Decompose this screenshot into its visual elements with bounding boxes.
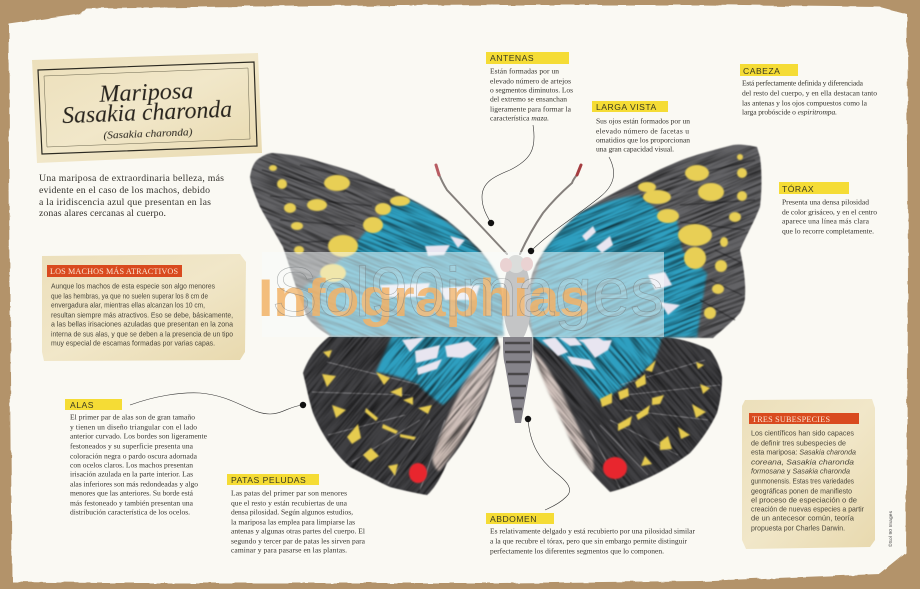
text: larga vista — [596, 116, 690, 154]
label: larga vista: LARGA VISTA — [596, 102, 657, 112]
text: alas: menores que las anteriores. Su borde está — [70, 488, 194, 498]
text: patas peludas: que el resto y están recubiertas de una — [231, 498, 348, 508]
antennae — [436, 165, 581, 254]
text: antenas — [490, 66, 573, 122]
text: patas peludas: caminar y para pasarse en las plantas. — [231, 546, 347, 554]
panel: tres subespecies — [742, 399, 875, 549]
heading: tres subespecies: TRES SUBESPECIES — [752, 415, 830, 424]
text: tórax: Presenta una densa pilosidad — [782, 198, 869, 206]
leader line: abdomen — [525, 416, 570, 510]
text: tres subespecies: propuesta por Charles Darwin. — [751, 524, 845, 532]
text: antenas: elevado número de artejos — [490, 76, 571, 86]
title text: Sasakia charonda — [62, 97, 233, 129]
label: abdomen: ABDOMEN — [490, 514, 537, 524]
watermark band: Infographias — [258, 269, 590, 328]
text: antenas: ligeramente para formar la — [490, 104, 572, 114]
butterfly illustration — [186, 63, 829, 589]
label: larga vista — [592, 101, 690, 154]
text: alas: irisación azulada en la parte interior. Las — [70, 470, 193, 478]
label: tórax: TÓRAX — [782, 184, 814, 194]
hindwing left — [225, 239, 578, 589]
text: alas: más festoneado y también presentan una — [70, 498, 194, 508]
text: patas peludas: segundo y tercer par de patas les sirven para — [231, 536, 366, 546]
text: cabeza: del resto del cuerpo, y en ella destacan tanto — [742, 88, 877, 98]
label: antenas: ANTENAS — [490, 53, 534, 63]
text: tres subespecies: formosana y Sasakia charonda — [751, 466, 850, 476]
intro text: a la iridiscencia azul que presentan en las — [39, 197, 211, 208]
forewing left — [186, 65, 568, 424]
watermark band: Sol90images — [272, 253, 664, 331]
text: los machos — [51, 282, 234, 348]
intro text: zonas alares cercanas al cuerpo. — [39, 208, 166, 219]
credit: ©Sol 90 Images — [887, 510, 894, 547]
leader line: larga vista — [528, 157, 614, 254]
label: alas: ALAS — [70, 400, 94, 410]
text: patas peludas: Las patas del primer par son menores — [231, 488, 347, 498]
text: abdomen: perfectamente los diferentes segmentos que lo componen. — [490, 546, 664, 556]
text: tres subespecies: de definir tres subespecies de — [751, 438, 846, 448]
text: los machos: resultan siempre más atractivos. Eso se debe, básicamente, — [51, 310, 233, 320]
label: tórax — [779, 182, 877, 236]
text: alas: coloración negra o pardo oscura adornada — [70, 452, 198, 460]
text: los machos: Aunque los machos de esta especie son algo menores — [51, 282, 215, 290]
text: los machos: que las hembras, ya que no suelen superar los 8 cm de — [51, 292, 208, 300]
text: antenas: del extremo se ensanchan — [490, 94, 567, 104]
label: cabeza: CABEZA — [743, 66, 780, 76]
text: los machos: muy especial de escamas formadas por varias capas. — [51, 338, 215, 348]
intro text — [39, 173, 224, 219]
text: cabeza: larga probóscide o espiritrompa. — [742, 108, 837, 116]
text: tórax: aparece una línea más clara — [782, 216, 870, 226]
text: cabeza — [742, 78, 877, 116]
text: abdomen: Es relativamente delgado y está recubierto por una pilosidad similar — [490, 526, 696, 536]
text: larga vista: omatidios que los proporcionan — [596, 136, 690, 144]
text: alas: festoneados y su superficie presenta una — [70, 442, 194, 450]
text: patas peludas: antenas y algunas otras partes del cuerpo. El — [231, 526, 365, 536]
title text — [61, 77, 233, 143]
text: tres subespecies: de un antecesor común, teoría — [751, 514, 855, 522]
intro text: Una mariposa de extraordinaria belleza, más — [39, 173, 224, 184]
heading: tres subespecies — [749, 413, 859, 424]
text: alas — [70, 412, 208, 516]
text: larga vista: elevado número de facetas u — [596, 126, 689, 136]
label: antenas — [486, 52, 573, 122]
label: patas peludas: PATAS PELUDAS — [231, 475, 306, 485]
heading: los machos: LOS MACHOS MÁS ATRACTIVOS — [50, 266, 178, 276]
text: tres subespecies: geográficas ponen de manifiesto — [751, 486, 852, 496]
text: tres subespecies: coreana, Sasakia charonda — [751, 458, 854, 466]
text: tres subespecies: creación de nuevas especies a partir — [751, 504, 864, 514]
forewing right — [459, 63, 829, 420]
text: antenas: Están formadas por un — [490, 66, 559, 76]
text: alas: El primer par de alas son de gran tamaño — [70, 412, 195, 422]
text: alas: con ocelos claros. Los machos presentan — [70, 460, 193, 470]
text: los machos: interna de sus alas, y que se deben a la presencia de un tipo — [51, 330, 233, 338]
text: alas: alas inferiores son más redondeadas y algo — [70, 480, 198, 488]
title text: (Sasakia charonda) — [103, 127, 193, 142]
text: tórax — [782, 198, 877, 236]
body: head, thorax, abdomen — [500, 255, 533, 423]
label: alas — [65, 399, 208, 516]
text: larga vista: una gran capacidad visual. — [596, 144, 674, 154]
text: cabeza: Está perfectamente definida y diferenciada — [742, 78, 864, 88]
text: abdomen: a la que recubre el tórax, pero que sin embargo permite distinguir — [490, 536, 688, 546]
label: abdomen — [486, 513, 696, 556]
text: tórax: que lo recorre completamente. — [782, 226, 874, 236]
text: tres subespecies: el proceso de especiación o de — [751, 496, 857, 504]
leader line: antenas — [482, 125, 534, 226]
text: tres subespecies: Los científicos han sido capaces — [751, 428, 854, 438]
text: tórax: de color grisáceo, y en el centro — [782, 208, 877, 216]
hindwing right — [456, 242, 799, 585]
text: alas: y tienen un diseño triangular con el lado — [70, 422, 197, 432]
leader line: alas — [130, 393, 306, 414]
label: cabeza — [740, 64, 877, 116]
text: los machos: envergadura alar, mientras ellas alcanzan los 10 cm, — [51, 300, 205, 310]
panel: los machos más atractivos — [42, 254, 246, 361]
intro text: evidente en el caso de los machos, debido — [39, 185, 210, 196]
text: tres subespecies: esta mariposa: Sasakia charonda — [751, 448, 856, 456]
text: los machos: a las bellas irisaciones azuladas que presentan en la zona — [51, 320, 234, 328]
text: patas peludas: la mariposa las emplea para limpiarse las — [231, 518, 355, 526]
text: alas: distribución característica de los ocelos. — [70, 508, 190, 516]
text: patas peludas — [231, 488, 366, 554]
text: tres subespecies — [751, 428, 864, 532]
text: patas peludas: densa pilosidad. Según algunos estudios, — [231, 508, 353, 516]
text: abdomen — [490, 526, 696, 556]
text: alas: anterior curvado. Los bordes son ligeramente — [70, 432, 208, 440]
title text: Mariposa — [98, 78, 194, 108]
text: cabeza: las antenas y los ojos compuestos como la — [742, 98, 868, 108]
title card — [32, 53, 262, 163]
text: larga vista: Sus ojos están formados por un — [596, 116, 690, 126]
text: antenas: característica maza. — [490, 114, 549, 122]
label: patas peludas — [227, 474, 366, 554]
text: antenas: o segmentos diminutos. Los — [490, 86, 573, 94]
text: tres subespecies: gunmonensis. Estas tres variedades — [751, 476, 854, 486]
